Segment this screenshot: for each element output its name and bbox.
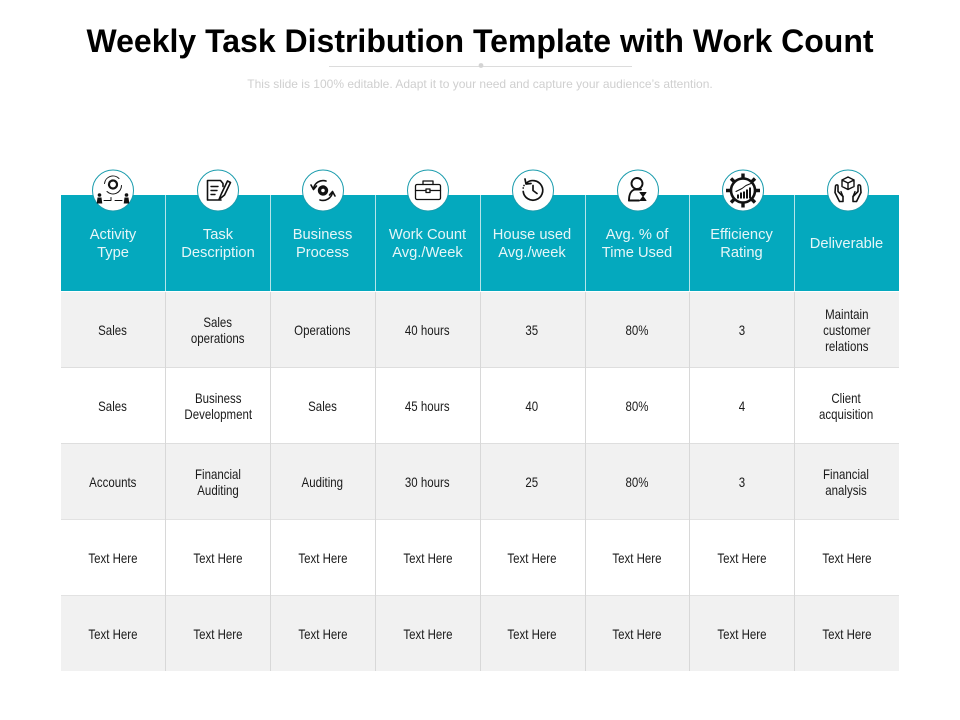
icon: time used person [618, 170, 658, 211]
title divider [329, 63, 632, 68]
row 1: customer [823, 322, 870, 338]
row 3: 25 [526, 474, 538, 490]
header: Task Description: Description [181, 245, 255, 261]
row 2: Business [195, 390, 241, 406]
header: House used Avg./week [493, 227, 571, 261]
header: House used Avg./week: Avg./week [498, 245, 566, 261]
row 1: Operations [294, 322, 351, 338]
row 2: Sales [99, 398, 127, 414]
row 4: Text Here [717, 550, 766, 566]
icon: hours clock [512, 170, 554, 211]
row 4: Text Here [193, 550, 243, 566]
title: Weekly Task Distribution Template with Work Count [86, 23, 874, 59]
row 3: analysis [826, 482, 867, 498]
icon: efficiency gear chart [722, 170, 764, 211]
header: Efficiency Rating [710, 227, 773, 261]
row 5 [88, 626, 871, 642]
row 5: Text Here [507, 626, 557, 642]
header: Business Process [293, 227, 352, 261]
row 1: Maintain [825, 306, 868, 322]
header: Work Count Avg./Week: Avg./Week [392, 245, 463, 261]
header: Business Process: Business [293, 227, 352, 243]
row 5: Text Here [717, 626, 766, 642]
header: Avg. % of Time Used [602, 227, 672, 261]
icon: business process [302, 170, 344, 211]
row 4: Text Here [403, 550, 452, 566]
table [61, 195, 899, 671]
row 3: Auditing [197, 482, 239, 498]
header: Efficiency Rating: Rating [720, 245, 763, 261]
header: Task Description: Task [203, 227, 233, 243]
header: Work Count Avg./Week [388, 227, 466, 261]
row 1: 80% [626, 322, 648, 338]
header: Activity Type [90, 227, 136, 261]
icon: deliverable hands and box [828, 170, 868, 211]
row 5: Text Here [403, 626, 452, 642]
icon: activity type [92, 170, 134, 211]
row 1: 35 [526, 322, 538, 338]
row 3: Financial [195, 466, 241, 482]
header: Deliverable: Deliverable [810, 236, 883, 252]
row 1: 3 [738, 322, 745, 338]
row 1 [98, 306, 870, 354]
header: Activity Type: Type [97, 245, 129, 261]
subtitle: This slide is 100% editable. Adapt it to your need and capture your audience’s attention. [247, 77, 713, 91]
row 1: relations [825, 338, 868, 354]
row 4: Text Here [298, 550, 347, 566]
row 4: Text Here [822, 550, 871, 566]
row 5: Text Here [298, 626, 347, 642]
header: Efficiency Rating: Efficiency [710, 227, 773, 243]
icon: work count briefcase [408, 170, 448, 211]
header: Avg. % of Time Used: Time Used [602, 245, 672, 261]
header: Task Description [181, 227, 255, 261]
row 4: Text Here [612, 550, 662, 566]
header: House used Avg./week: House used [493, 227, 571, 243]
row 4: Text Here [88, 550, 138, 566]
row 5: Text Here [88, 626, 138, 642]
row 2: 45 hours [405, 398, 450, 414]
row 2: acquisition [819, 406, 874, 422]
header: Work Count Avg./Week: Work Count [389, 227, 466, 243]
row 4 [88, 550, 871, 566]
row 3: Accounts [89, 474, 137, 490]
row 3: 80% [626, 474, 648, 490]
row 1: operations [191, 330, 245, 346]
header: Business Process: Process [296, 245, 349, 261]
icon: task description [198, 170, 238, 211]
header: Avg. % of Time Used: Avg. % of [606, 227, 668, 243]
row 1: Sales [204, 314, 232, 330]
row 1: 40 hours [405, 322, 450, 338]
row 5: Text Here [612, 626, 662, 642]
row 1: Sales [99, 322, 127, 338]
row 4: Text Here [507, 550, 557, 566]
row 3: Auditing [302, 474, 343, 490]
row 2: 80% [626, 398, 648, 414]
row 2: Sales [308, 398, 337, 414]
row 5: Text Here [193, 626, 243, 642]
row 2: 4 [738, 398, 745, 414]
header: Activity Type: Activity [90, 227, 136, 243]
row 2: 40 [526, 398, 538, 414]
row 5: Text Here [822, 626, 871, 642]
row 2: Development [184, 406, 252, 422]
row 2 [98, 390, 874, 422]
row 3: 30 hours [405, 474, 450, 490]
row 3: Financial [824, 466, 869, 482]
row 3: 3 [738, 474, 745, 490]
row 2: Client [832, 390, 861, 406]
row 3 [89, 466, 869, 498]
